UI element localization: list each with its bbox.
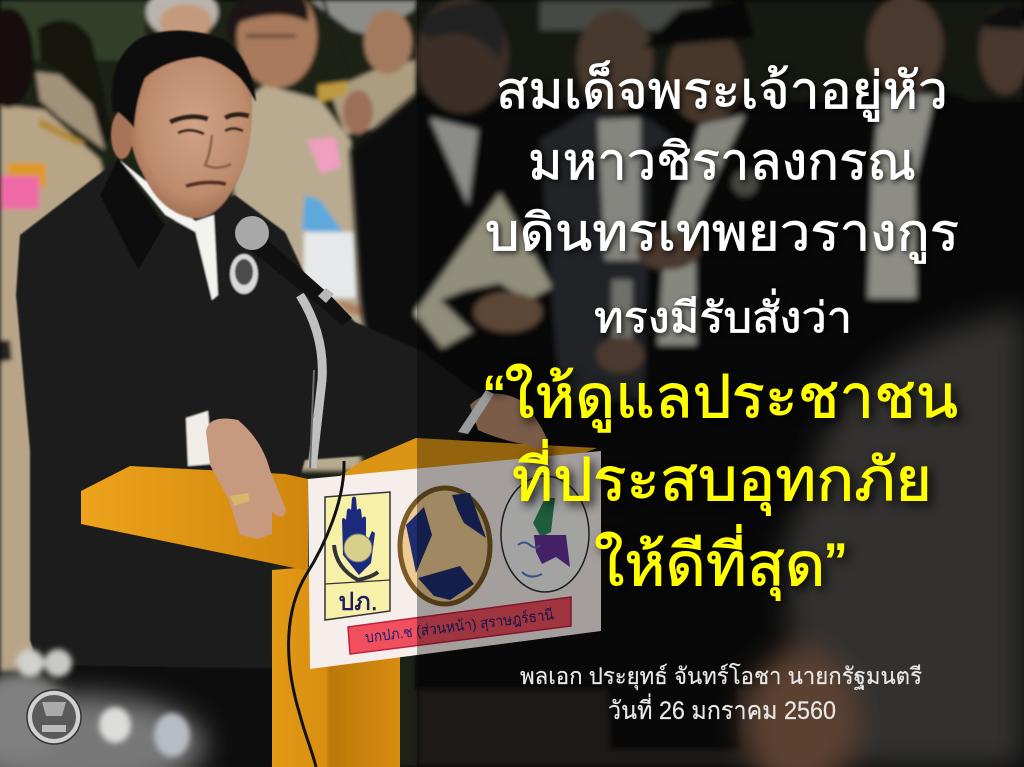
jacket <box>16 158 480 668</box>
attribution and date: วันที่ 26 มกราคม 2560 <box>608 693 836 725</box>
cuff left <box>186 411 212 466</box>
bokeh foreground bottom left <box>0 649 205 767</box>
lectern back top <box>320 438 597 490</box>
quote in yellow: ให้ดีที่สุด” <box>594 524 846 601</box>
lectern sign <box>308 451 601 669</box>
microphone stand <box>300 295 322 468</box>
background crowd right <box>350 0 1024 767</box>
heading: royal title: สมเด็จพระเจ้าอยู่หัว <box>496 61 948 122</box>
officer far right <box>318 10 417 135</box>
face <box>125 50 252 218</box>
logo card <box>325 492 390 620</box>
lectern <box>81 390 601 767</box>
trousers <box>30 660 280 767</box>
grey-haired officer <box>146 0 218 40</box>
round seal: lion <box>400 488 490 604</box>
heading: royal title: บดินทรเทพยวรางกูร <box>485 204 959 264</box>
collar shading <box>100 158 165 270</box>
man with glasses <box>350 0 540 455</box>
blurred foreground shape <box>744 310 1024 767</box>
heading: royal title <box>485 61 959 264</box>
folder <box>415 193 552 348</box>
attribution and date <box>520 663 922 725</box>
quote in yellow: “ให้ดูแลประชาชน <box>484 363 958 432</box>
nose and mouth <box>205 135 231 168</box>
attribution and date: พลเอก ประยุทธ์ จันทร์โอชา นายกรัฐมนตรี <box>520 663 922 690</box>
officer with glasses <box>225 0 383 470</box>
red name banner: บกปภ.ช (ส่วนหน้า) สุราษฎร์ธานี <box>364 607 555 648</box>
lower dark legs and ground <box>417 690 787 767</box>
government seal <box>27 690 81 744</box>
eyes <box>178 128 243 134</box>
woman behind <box>36 20 112 150</box>
round seal: hanuman <box>501 476 589 592</box>
quote in yellow: ที่ประสบอุทกภัย <box>512 439 932 516</box>
subheading: ทรงมีรับสั่งว่า <box>594 289 852 341</box>
hair <box>112 30 256 128</box>
background crowd left <box>0 0 417 767</box>
heading: royal title: มหาวชิราลงกรณ <box>528 133 916 190</box>
hand on lectern <box>206 418 286 539</box>
logo card: ปภ. <box>338 588 378 616</box>
neck and shirt <box>120 160 213 300</box>
ear <box>111 111 133 159</box>
dark overlay panel <box>417 0 1024 767</box>
umbrella <box>310 0 417 95</box>
grey jacket man <box>540 10 690 400</box>
man far right <box>820 0 1024 360</box>
hand right <box>470 394 548 448</box>
red name banner <box>348 597 571 654</box>
officer left <box>0 8 108 670</box>
lectern base post <box>272 560 400 767</box>
eyebrows <box>170 114 249 122</box>
badge <box>230 254 258 294</box>
microphone <box>235 216 352 326</box>
microphone cable <box>289 461 344 767</box>
man in cap <box>636 0 860 560</box>
lectern sloped top <box>81 466 308 570</box>
quote in yellow <box>484 363 958 601</box>
main figure: prime minister <box>16 30 480 767</box>
